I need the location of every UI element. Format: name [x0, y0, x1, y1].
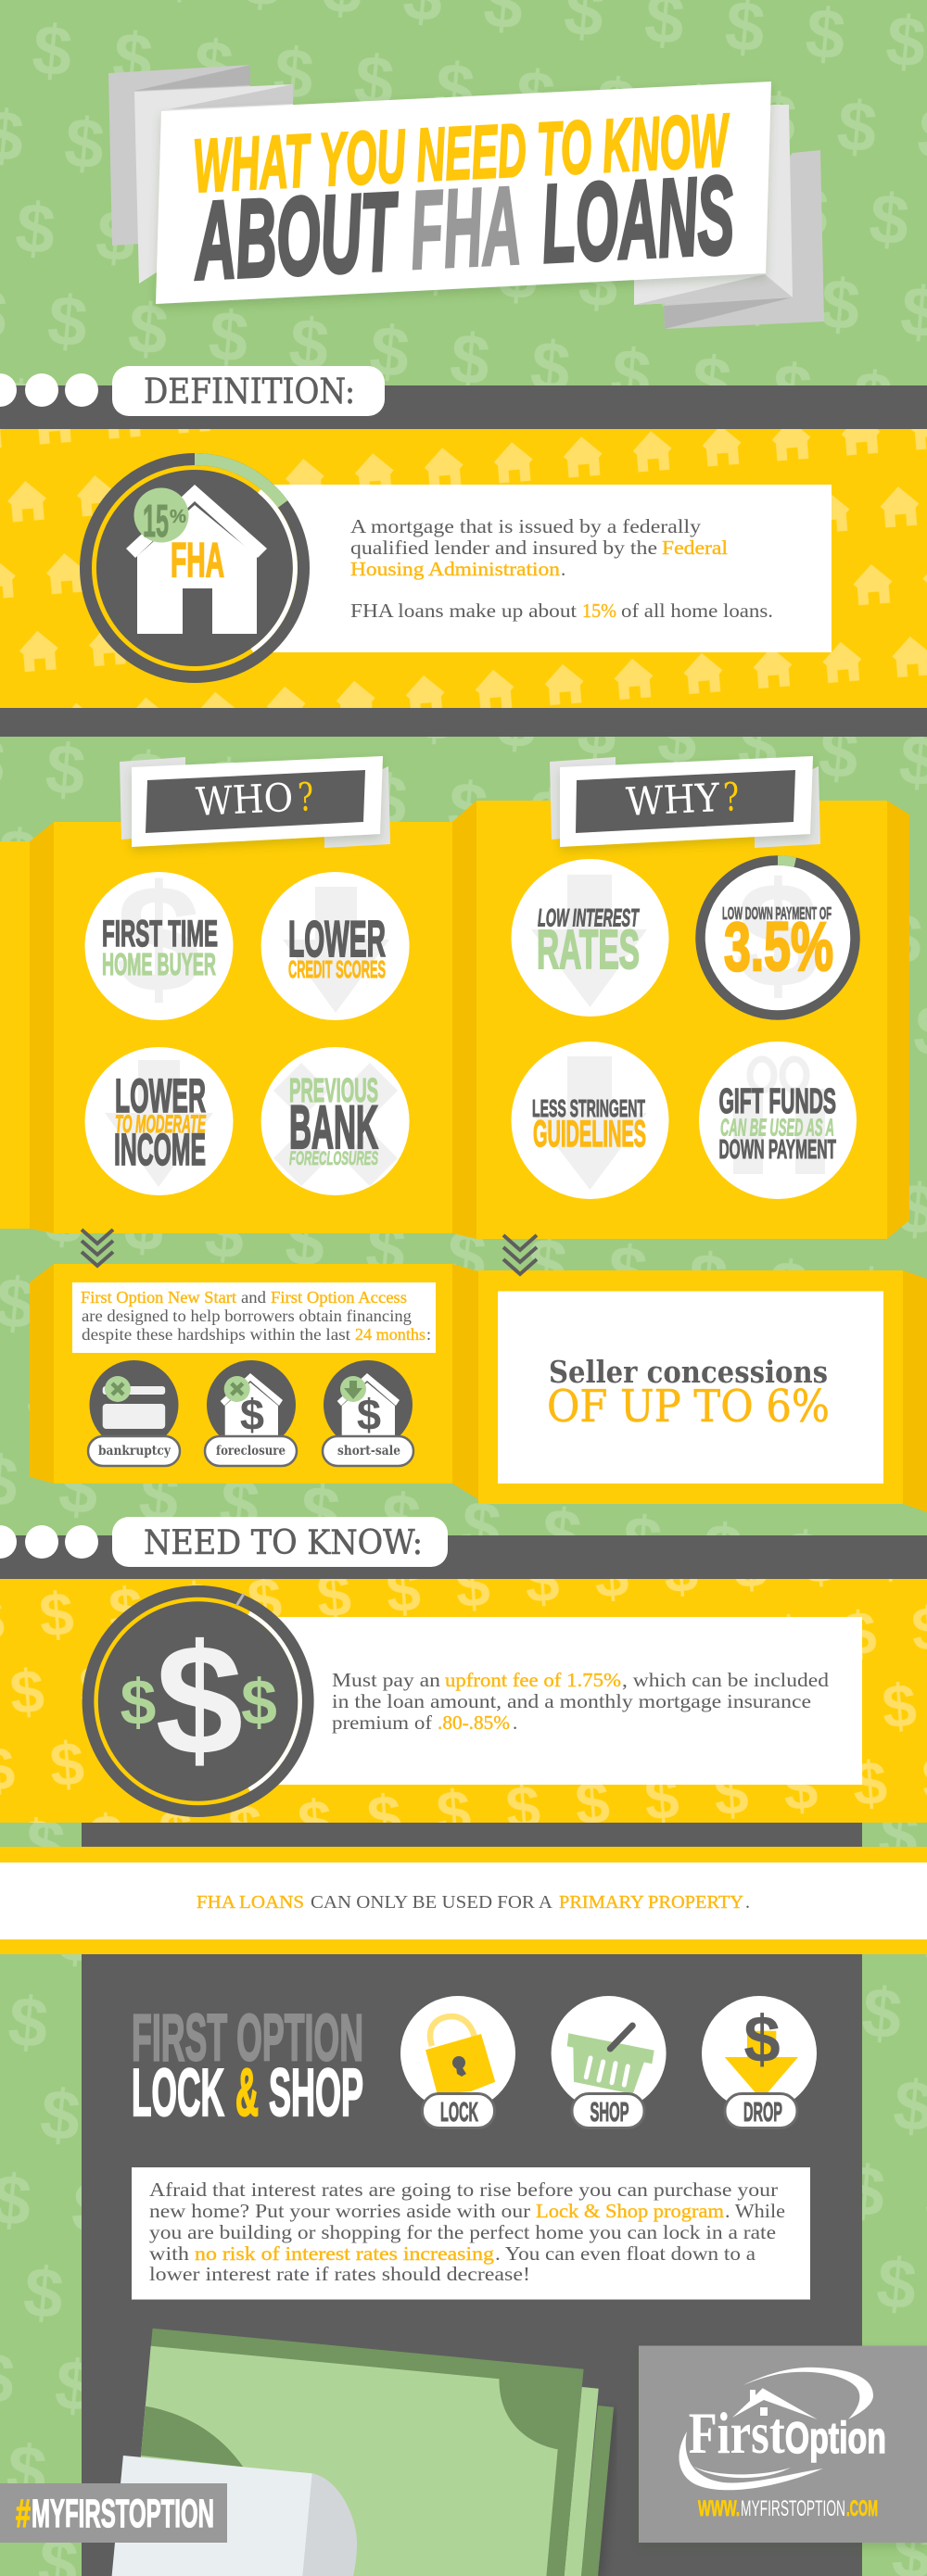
yellow folded panel — [478, 1270, 927, 1512]
icon: short-sale: short-sale — [337, 1444, 400, 1458]
ribbon folds right — [634, 105, 824, 329]
definition text panel: FHA loans make up about — [350, 600, 577, 622]
circle: gift funds: GIFT FUNDS — [719, 1082, 836, 1121]
heading: first option lock and shop: & — [235, 2056, 259, 2130]
website url: .COM — [846, 2496, 878, 2521]
heading pill: need to know — [112, 1517, 448, 1567]
circle: lower to moderate income: TO MODERATE — [115, 1110, 206, 1138]
title line 2: ABOUT — [190, 170, 403, 303]
hashtag label — [0, 2483, 227, 2543]
circle: first time home buyer — [85, 853, 234, 1024]
icon: FHA house badge: % — [170, 507, 186, 527]
heading ribbon: why — [550, 756, 820, 848]
illustration: stack of money — [112, 2329, 614, 2576]
hashtag label: MYFIRSTOPTION — [32, 2492, 214, 2536]
heading: first option lock and shop: LOCK — [132, 2056, 224, 2130]
circle: low down payment: 3.5% — [724, 908, 833, 985]
website url: MYFIRSTOPTION — [741, 2496, 845, 2521]
lock and shop text box: lower interest rate if rates should decrease! — [149, 2263, 530, 2285]
icon: lock: LOCK — [440, 2098, 478, 2128]
panel: hardships — [30, 1264, 478, 1499]
website url — [698, 2496, 878, 2521]
circle: first time home buyer: $ — [116, 853, 201, 1024]
icon: shopping basket: SHOP — [590, 2098, 629, 2128]
callout: primary property: . — [745, 1892, 750, 1913]
yellow folded panel — [0, 801, 476, 1239]
circle: less stringent guidelines: GUIDELINES — [533, 1114, 646, 1155]
callout: primary property: PRIMARY PROPERTY — [559, 1892, 743, 1913]
yellow folded panel — [30, 1264, 478, 1499]
need to know text panel: premium of — [332, 1711, 432, 1734]
circle: previous bank foreclosures: PREVIOUS — [289, 1071, 378, 1109]
definition text panel: . — [561, 558, 565, 580]
hardship text box: despite these hardships within the last — [82, 1325, 350, 1344]
icon: foreclosure: $ — [240, 1390, 264, 1439]
hardship text box: and — [241, 1288, 266, 1307]
icon: dollar badge: $ — [156, 1612, 243, 1788]
definition text panel: 15% — [582, 600, 616, 622]
callout: primary property: FHA LOANS — [197, 1892, 304, 1913]
lock and shop text box: no risk of interest rates increasing — [195, 2242, 495, 2265]
heading ribbon: who: ? — [297, 774, 314, 820]
lower dark column — [82, 1816, 862, 2576]
lock and shop text box: with — [149, 2242, 190, 2265]
icon: dollar badge — [83, 1585, 314, 1817]
circle: lower to moderate income: INCOME — [114, 1126, 206, 1175]
hashtag label: # — [16, 2492, 31, 2536]
title line 2 — [190, 154, 737, 303]
circle: lower to moderate income — [85, 1047, 234, 1195]
hardship text box: First Option New Start — [81, 1288, 236, 1307]
section: need to know — [0, 1517, 927, 1823]
need to know text panel: in the loan amount, and a monthly mortgage insurance — [332, 1690, 811, 1712]
lock and shop text box: Afraid that interest rates are going to rise before you can purchase your — [149, 2178, 778, 2201]
need to know text panel: , which can be included — [622, 1669, 830, 1691]
icon: rate drop — [702, 1996, 817, 2128]
patterned yellow band — [0, 1579, 927, 1823]
circle: less stringent guidelines: LESS STRINGENT — [532, 1094, 645, 1122]
lock and shop text box: . While — [725, 2200, 785, 2222]
need to know text panel: . — [513, 1711, 517, 1734]
circle: low down payment: $ — [736, 852, 819, 1019]
heading ribbon: who — [120, 756, 390, 848]
lock and shop text box: new home? Put your worries aside with our — [149, 2200, 530, 2222]
panel: why — [476, 756, 909, 1239]
logo swooshes and roof — [679, 2368, 873, 2490]
arrow: who chevrons — [82, 1230, 113, 1266]
circle: lower to moderate income: LOWER — [115, 1069, 206, 1122]
need to know text panel: .80-.85% — [438, 1711, 510, 1734]
seller concessions box: Seller concessions — [549, 1354, 828, 1390]
icon: rate drop: $ — [743, 2003, 781, 2077]
circle: previous bank foreclosures: BANK — [289, 1092, 378, 1161]
icon: short-sale — [323, 1360, 413, 1466]
header dots — [0, 373, 98, 407]
circle: first time home buyer: FIRST TIME — [102, 914, 218, 954]
icon: dollar badge: $ — [121, 1666, 156, 1738]
circle: lower credit scores: CREDIT SCORES — [288, 955, 386, 983]
seller concessions box — [498, 1292, 883, 1484]
icon: bankruptcy: bankruptcy — [98, 1444, 171, 1458]
definition text panel: Federal — [662, 537, 728, 559]
definition text panel: qualified lender and insured by the — [350, 537, 657, 559]
website url: WWW. — [698, 2496, 740, 2521]
circle: low interest rates: RATES — [537, 919, 640, 980]
heading pill: definition: DEFINITION: — [144, 372, 355, 411]
definition text panel: A mortgage that is issued by a federally — [350, 515, 702, 537]
title banner — [108, 65, 824, 329]
icon: short-sale: $ — [357, 1390, 381, 1439]
callout: primary property: CAN ONLY BE USED FOR A — [311, 1892, 553, 1913]
circle: lower credit scores — [261, 872, 410, 1020]
panel: seller concessions — [478, 1270, 927, 1512]
hardship text box — [72, 1282, 436, 1353]
circle: less stringent guidelines — [512, 1042, 669, 1199]
heading: first option lock and shop — [132, 2002, 363, 2130]
white title panel — [156, 82, 771, 304]
circle: low down payment — [701, 852, 855, 1019]
infographic canvas: SHOP — [269, 2056, 363, 2130]
panel: who — [0, 756, 476, 1239]
heading: first option lock and shop: FIRST OPTION — [132, 2002, 363, 2076]
header dots — [0, 1525, 98, 1559]
heading ribbon: who: WHO — [195, 775, 294, 825]
icon: lock — [400, 1996, 515, 2128]
hardship text box: : — [426, 1325, 431, 1344]
circle: low interest rates — [512, 859, 669, 1017]
need to know text panel — [260, 1617, 862, 1785]
circle: previous bank foreclosures: FORECLOSURES — [289, 1148, 378, 1169]
seller concessions box: OF UP TO 6% — [547, 1381, 830, 1433]
definition text panel: Housing Administration — [350, 558, 561, 580]
header bar — [0, 385, 927, 429]
arrow: why chevrons — [503, 1235, 537, 1274]
lock and shop text box: Lock & Shop program — [536, 2200, 724, 2222]
icon: rate drop: DROP — [743, 2098, 782, 2128]
title line 2: FHA — [407, 164, 524, 293]
logo panel: First Option: Option — [785, 2413, 886, 2462]
section: definition — [0, 366, 927, 737]
icon: shopping basket — [552, 1996, 667, 2128]
icon: FHA house badge: FHA — [171, 534, 224, 587]
icon: bankruptcy — [88, 1360, 180, 1466]
icon: foreclosure — [205, 1360, 297, 1466]
heading ribbon: why: WHY — [625, 775, 722, 825]
lock and shop text box: . You can even float down to a — [495, 2242, 756, 2265]
heading pill: need to know: NEED TO KNOW: — [144, 1524, 423, 1562]
lock and shop text box — [132, 2167, 810, 2300]
header bar — [0, 1535, 927, 1579]
definition text panel: of all home loans. — [621, 600, 773, 622]
circle: gift funds — [699, 1042, 857, 1199]
hardship text box: are designed to help borrowers obtain financing — [82, 1307, 412, 1325]
hardship text box: 24 months — [355, 1325, 425, 1344]
icon: FHA house badge: 15 — [143, 497, 169, 547]
need to know text panel: upfront fee of 1.75% — [445, 1669, 621, 1691]
circle: low interest rates: LOW INTEREST — [538, 904, 640, 932]
icon: FHA house badge — [80, 453, 310, 683]
hardship text box: First Option Access — [271, 1288, 407, 1307]
definition text panel — [250, 485, 832, 652]
ribbon folds left — [108, 65, 293, 284]
heading pill: definition — [112, 366, 385, 416]
callout: primary property — [0, 1847, 927, 1954]
circle: first time home buyer: HOME BUYER — [102, 947, 216, 981]
yellow folded panel — [476, 801, 909, 1239]
logo panel: First Option — [639, 2346, 927, 2543]
icon: foreclosure: foreclosure — [216, 1444, 286, 1458]
title line 2: LOANS — [539, 154, 737, 286]
heading ribbon: why: ? — [722, 774, 740, 820]
patterned yellow band — [0, 429, 927, 708]
circle: lower credit scores: LOWER — [288, 910, 386, 967]
circle: low down payment: LOW DOWN PAYMENT OF — [722, 904, 832, 923]
need to know text panel: Must pay an — [332, 1669, 441, 1691]
lock and shop text box: you are building or shopping for the perfect home you can lock in a rate — [149, 2221, 776, 2243]
logo panel: First Option: First — [689, 2400, 785, 2466]
circle: previous bank foreclosures — [261, 1047, 410, 1195]
icon: dollar badge: $ — [241, 1666, 277, 1738]
lower dark bar — [0, 708, 927, 737]
